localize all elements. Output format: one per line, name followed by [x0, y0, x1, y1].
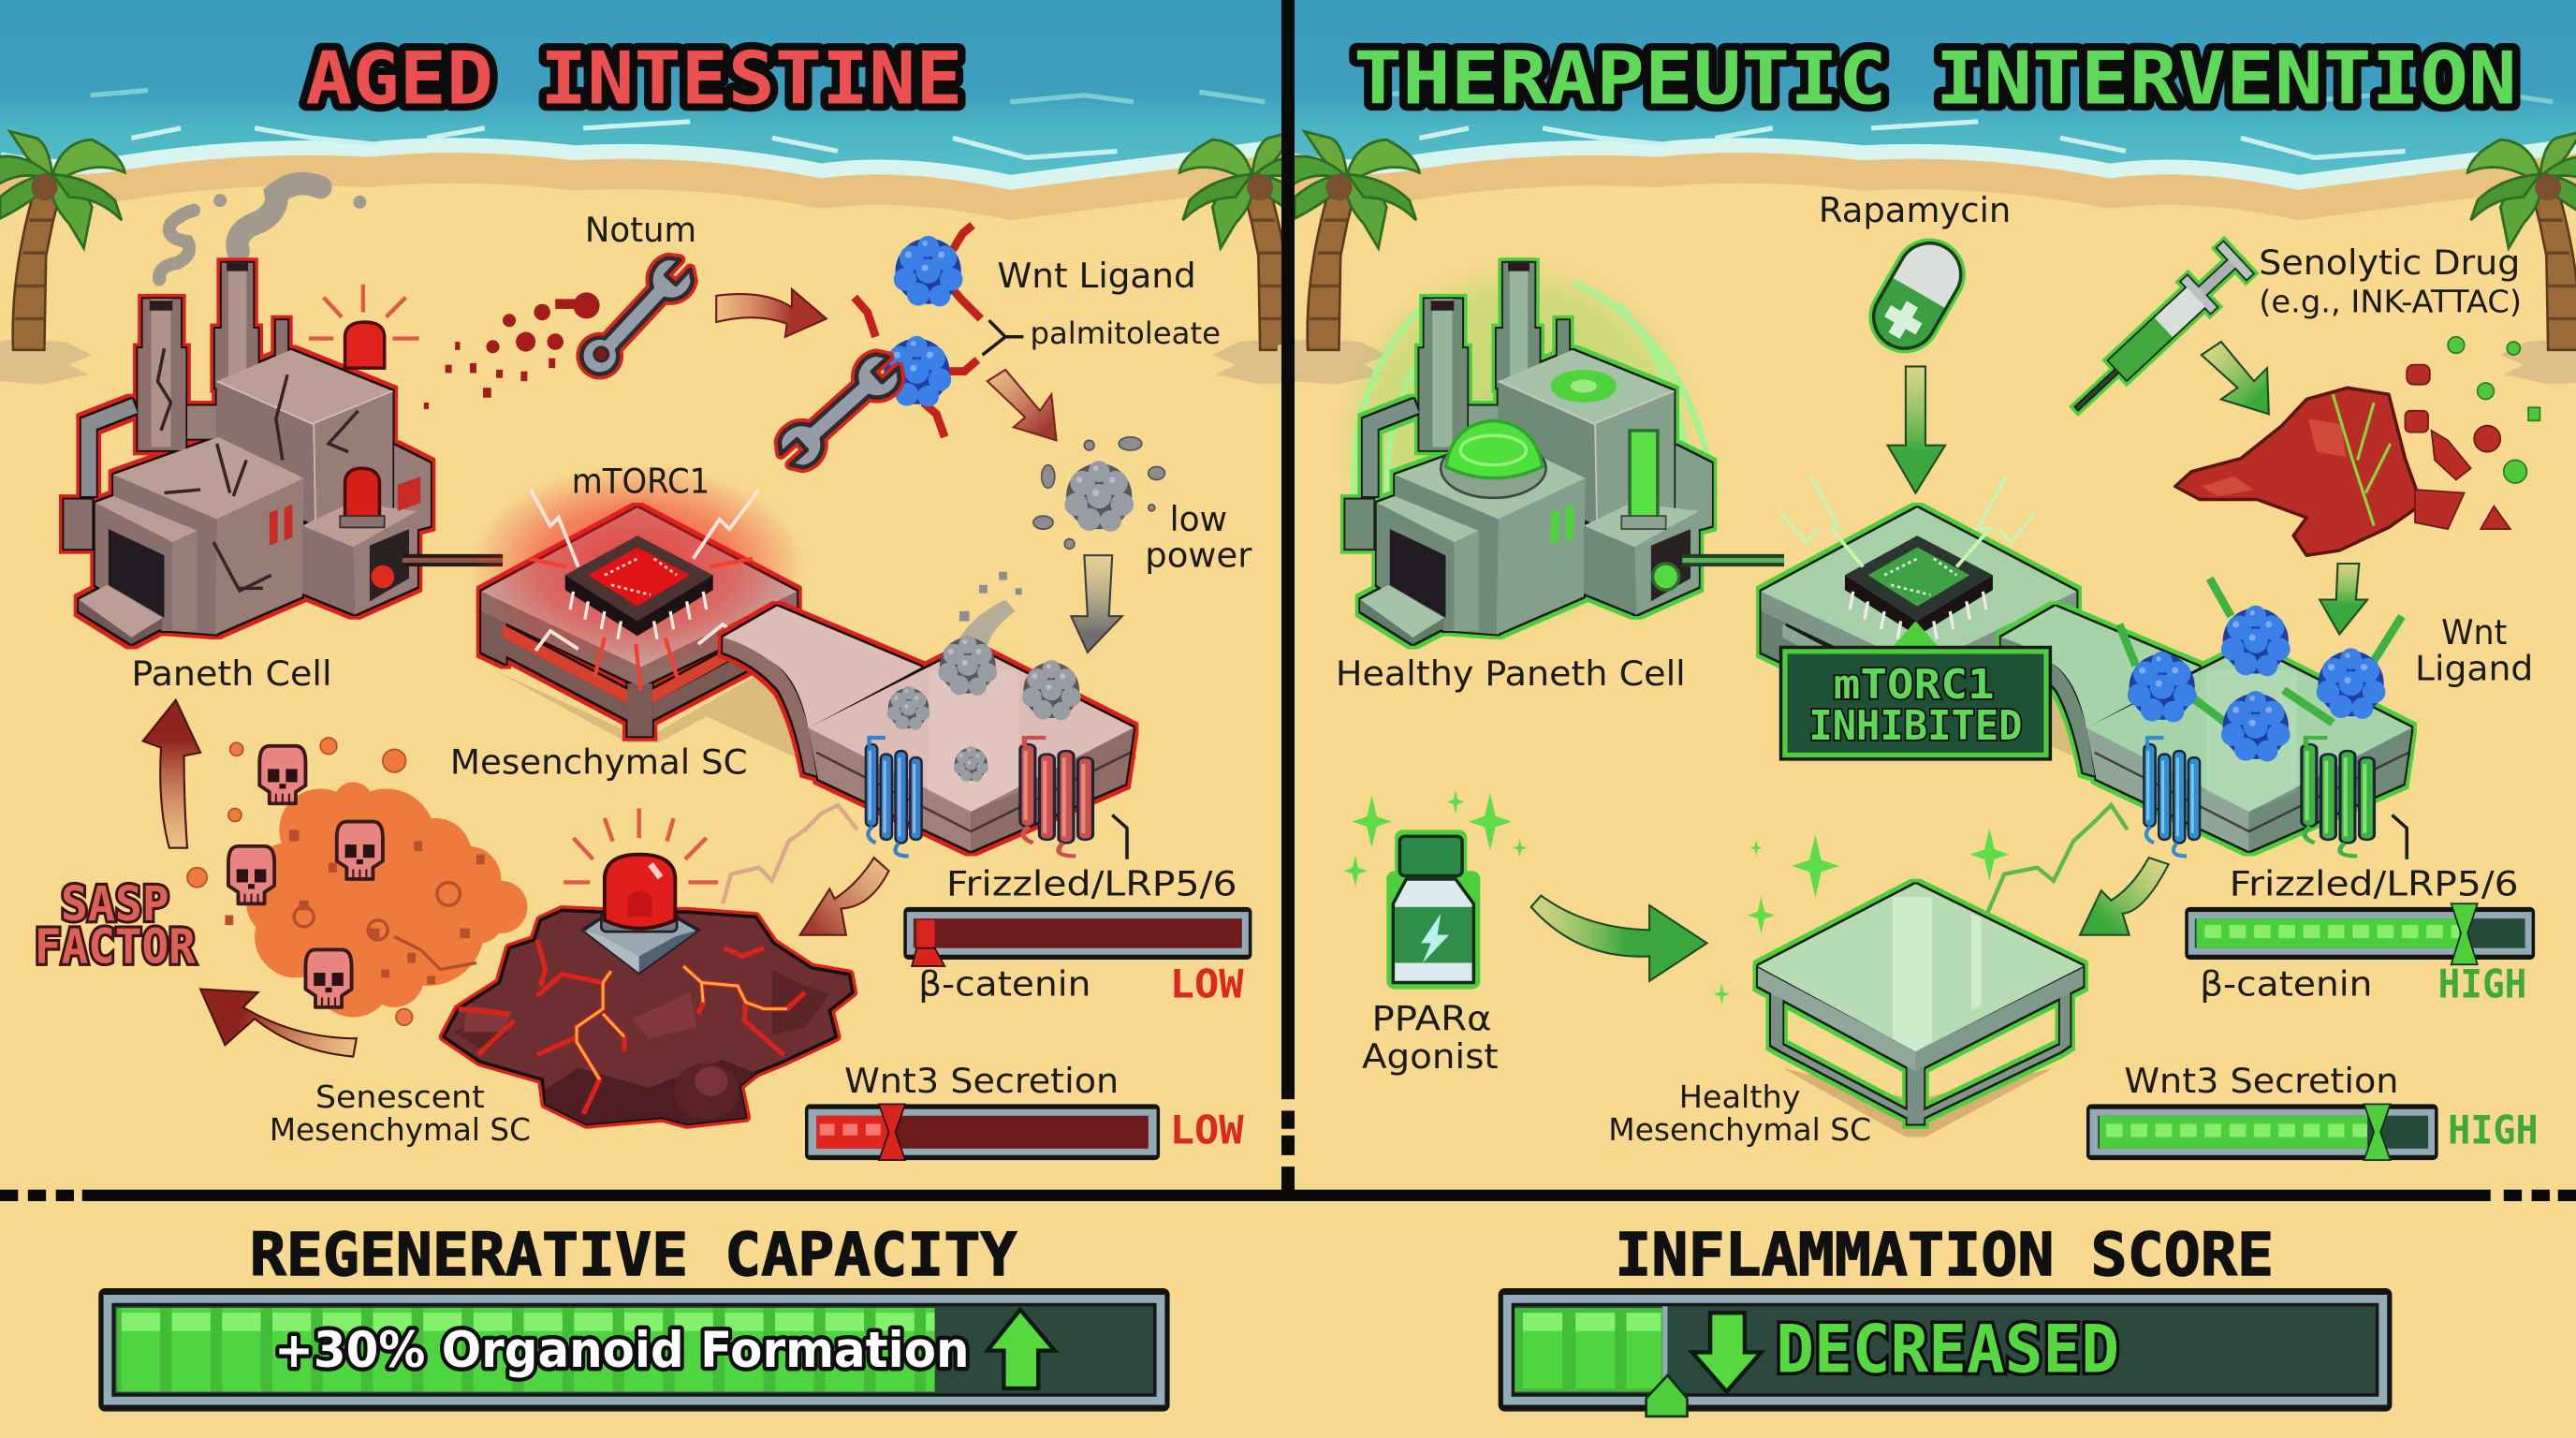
red glow around mTORC1 chip — [470, 465, 805, 668]
sparkles — [1343, 790, 2009, 1005]
mesenchymal platform: receptor plate — [723, 607, 1134, 851]
icon: Rapamycin capsule — [1855, 225, 1979, 366]
heading: inflammation score: INFLAMMATION SCORE — [1615, 1220, 2274, 1289]
receptor: Frizzled blue — [866, 738, 922, 856]
leader line: Frizzled — [2392, 815, 2407, 859]
label: Healthy Mesenchymal SC — [1608, 1078, 1871, 1148]
label: Wnt Ligand — [2415, 612, 2533, 689]
value: high: HIGH — [2448, 1108, 2539, 1153]
arrow: senescent cell to SASP — [200, 990, 357, 1057]
label: low power: power — [1145, 536, 1252, 576]
label: Senolytic Drug: Senolytic Drug — [2259, 242, 2520, 283]
label: Senescent Mesenchymal SC — [270, 1078, 531, 1148]
value: low: LOW — [1170, 1108, 1244, 1153]
icon: damaged Paneth cell factory — [64, 263, 431, 644]
label: Healthy Paneth Cell: Healthy Paneth Cell — [1336, 653, 1686, 694]
signal trail — [723, 805, 857, 903]
label: PPAR agonist — [1362, 998, 1499, 1077]
status bar: beta-catenin high — [2185, 903, 2535, 964]
arrow: PPAR agonist to table — [1531, 896, 1707, 981]
value: low: LOW — [1170, 961, 1244, 1006]
icon: senolytic syringe — [2062, 242, 2252, 424]
receptor: LRP green — [2302, 738, 2374, 856]
icon: palm tree left — [0, 131, 124, 385]
down arrow — [1692, 1313, 1761, 1392]
red vents — [270, 477, 420, 546]
panel: aged intestine beach scene — [0, 0, 1325, 385]
callout: mTORC1 inhibited — [1781, 621, 2050, 759]
arrow: down to receptor platform — [1071, 555, 1122, 653]
label: PPAR agonist: Agonist — [1362, 1036, 1499, 1077]
title: therapeutic intervention: THERAPEUTIC INTERVENTION — [1354, 37, 2517, 122]
label: Wnt Ligand: Wnt Ligand — [997, 256, 1196, 296]
status bar: Wnt3 high — [2086, 1104, 2438, 1160]
lava cracks — [459, 940, 805, 1114]
icon: Wnt ligand with palmitoleate chains — [894, 225, 981, 318]
halo around healthy factory — [1336, 259, 1715, 627]
value text: +30% Organoid Formation — [274, 1322, 970, 1379]
title: aged intestine: AGED INTESTINE — [305, 37, 962, 122]
signal trail — [1988, 805, 2128, 912]
arrow: to inactive Wnt — [988, 370, 1057, 440]
icon: healthy Paneth cell factory — [1345, 263, 1712, 644]
divider: vertical — [1281, 0, 1295, 1191]
table shadow — [1782, 1068, 2054, 1137]
arrow: syringe to senescent cell — [2202, 342, 2269, 414]
receptor: LRP red — [1020, 738, 1092, 856]
rooftop vent — [1551, 370, 1617, 403]
heading: regenerative capacity: REGENERATIVE CAPACITY — [250, 1220, 1017, 1289]
arrow: to senescent cell — [800, 858, 889, 935]
label: Senolytic Drug: (e.g., INK-ATTAC) — [2259, 283, 2522, 319]
mesenchymal platform: healthy receptor plate — [2001, 607, 2411, 851]
icon: healthy mesenchymal table — [1758, 884, 2083, 1123]
label: Wnt Ligand: Ligand — [2415, 649, 2533, 689]
label: Paneth Cell: Paneth Cell — [131, 653, 332, 694]
status bar: Wnt3 low — [805, 1104, 1160, 1160]
label: PPAR agonist: PPARα — [1372, 998, 1492, 1038]
debris — [225, 829, 485, 984]
callout: mTORC1 inhibited: INHIBITED — [1808, 702, 2023, 750]
icon: PPAR agonist bottle — [1386, 829, 1480, 990]
label: Senescent Mesenchymal SC: Mesenchymal SC — [270, 1111, 531, 1148]
arrow: SASP to Paneth cell — [143, 700, 200, 848]
icon: palm tree left — [1275, 131, 1419, 385]
green dome — [1441, 439, 1546, 498]
SASP orange cloud — [187, 738, 527, 1025]
platform shadow — [494, 664, 812, 761]
progress bar: inflammation score — [1499, 1288, 2392, 1416]
mesenchymal platform: healthy chip plate — [1761, 507, 2076, 736]
senescent cell being destroyed — [2175, 337, 2539, 555]
mesenchymal platform: chip plate — [481, 507, 797, 736]
icon: palm tree right — [2467, 131, 2576, 385]
label: Senescent Mesenchymal SC: Senescent — [315, 1078, 485, 1115]
label: Mesenchymal SC: Mesenchymal SC — [450, 742, 748, 783]
receptor: Frizzled blue — [2144, 738, 2200, 856]
progress bar: regenerative capacity — [98, 1288, 1170, 1412]
panel: therapeutic intervention beach scene — [1275, 0, 2576, 385]
status bar: beta-catenin low — [903, 907, 1251, 966]
label: Healthy Mesenchymal SC: Healthy — [1679, 1078, 1801, 1115]
icon: Notum wrench — [573, 251, 700, 383]
arrow: to healthy table — [2080, 858, 2169, 935]
marker — [1647, 1375, 1687, 1416]
label: mTORC1: mTORC1 — [572, 462, 710, 502]
fragments — [2405, 365, 2510, 529]
label: low power — [1145, 499, 1252, 576]
icon: grey inactive Wnt — [1033, 437, 1164, 549]
connector pipe: healthy cell to platform — [1682, 557, 1784, 564]
label: Wnt Ligand: Wnt — [2441, 612, 2507, 653]
icon: mTORC1 chip inhibited — [1781, 477, 2036, 639]
green tube — [1630, 431, 1658, 520]
label: SASP factor: FACTOR — [35, 919, 196, 975]
callout: mTORC1 inhibited: mTORC1 — [1834, 661, 1995, 709]
arrow: Rapamycin to mTORC1 — [1888, 366, 1945, 493]
value text: DECREASED — [1776, 1312, 2119, 1388]
divider: horizontal — [0, 1190, 2576, 1201]
value: high: HIGH — [2438, 961, 2526, 1006]
label: beta-catenin: β-catenin — [918, 964, 1090, 1005]
label: palmitoleate with bracket: palmitoleate — [1030, 315, 1221, 351]
up arrow — [988, 1310, 1055, 1388]
lightning — [531, 490, 759, 651]
label: SASP factor — [35, 877, 196, 975]
connector pipe: Paneth cell to platform — [402, 557, 503, 564]
senescent mesenchymal cell lava blob — [444, 910, 853, 1123]
green particles — [2448, 337, 2539, 483]
label: beta-catenin: β-catenin — [2200, 964, 2372, 1005]
icon: Notum wrench cleaving Wnt — [771, 298, 977, 475]
label: Notum: Notum — [585, 210, 696, 250]
arrow: senolytic to Wnt ligand — [2320, 564, 2367, 634]
icon: mTORC1 chip overactive — [529, 490, 759, 690]
label: SASP factor: SASP — [61, 877, 169, 932]
label: Frizzled/LRP5/6: Frizzled/LRP5/6 — [2230, 864, 2519, 904]
Wnt ligands on receptors — [2119, 579, 2402, 761]
icon: alarm siren — [564, 809, 718, 973]
warning lights — [309, 285, 419, 527]
label: Wnt3 Secretion: Wnt3 Secretion — [2124, 1061, 2398, 1101]
label: Wnt3 Secretion: Wnt3 Secretion — [844, 1061, 1119, 1101]
leader line: Frizzled — [1112, 815, 1127, 859]
smoke: aged factory — [159, 183, 359, 279]
cracks — [157, 348, 359, 592]
skull icons — [228, 746, 383, 1007]
label: Frizzled/LRP5/6: Frizzled/LRP5/6 — [946, 864, 1237, 904]
label: low power: low — [1170, 499, 1227, 539]
grey Wnt on receptors — [887, 572, 1081, 782]
label: Rapamycin: Rapamycin — [1819, 190, 2011, 230]
red dust trail — [424, 292, 600, 409]
icon: palm tree right — [1179, 131, 1325, 385]
arrow: Notum to Wnt — [716, 289, 827, 337]
label: Senolytic Drug — [2259, 242, 2522, 319]
label: Healthy Mesenchymal SC: Mesenchymal SC — [1608, 1111, 1871, 1148]
platform shadow — [1775, 664, 2089, 761]
